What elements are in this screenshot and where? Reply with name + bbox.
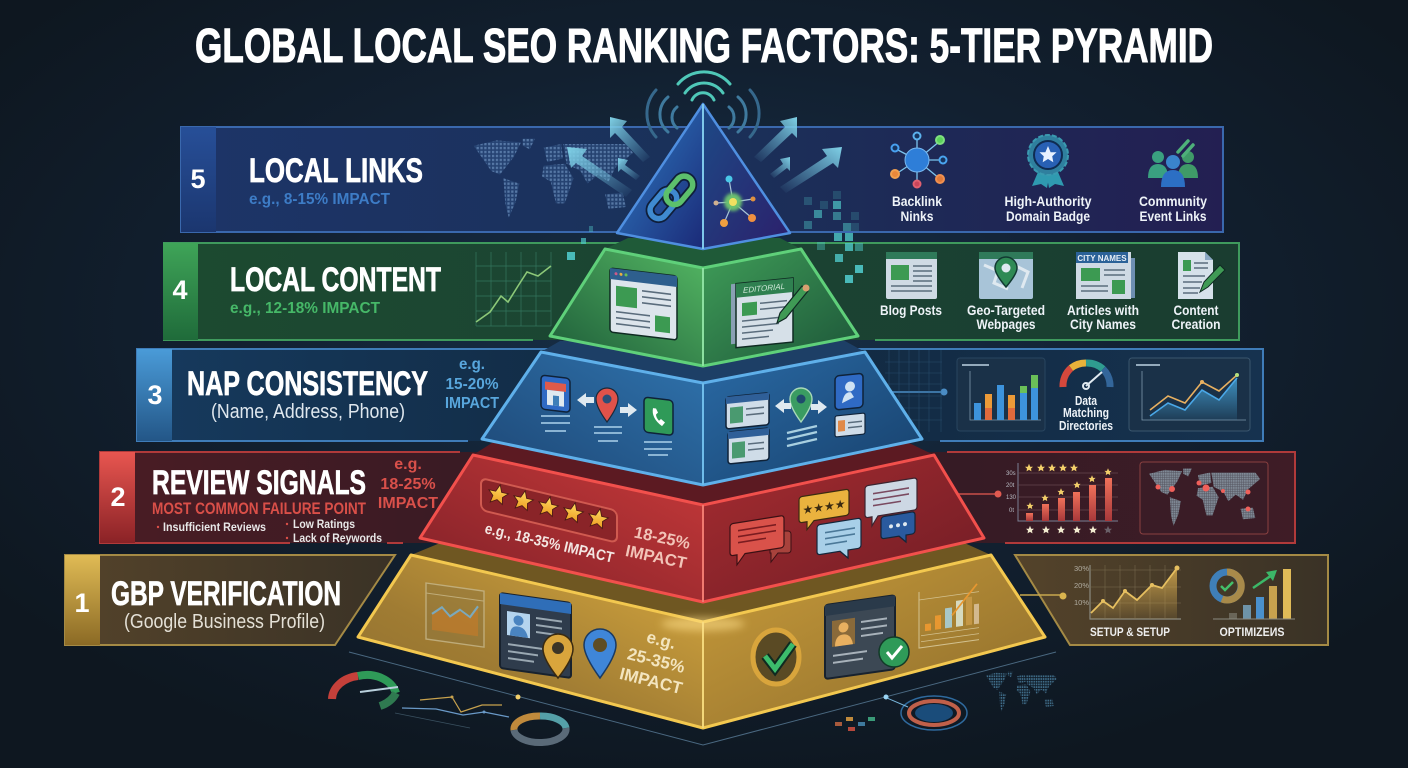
tier 3 impact: 15-20% [446,376,498,393]
icon: blue contact tile [835,373,863,410]
colored tile cluster [835,717,875,731]
icon: green phone tile [644,397,673,435]
icon: green map pin [790,388,812,422]
tier 2 number block: 2 [110,482,126,512]
label: community event links: Community [1139,193,1207,209]
tier 2 number block [100,452,135,543]
label: geo-targeted webpages: Geo-Targeted [967,302,1045,318]
tier 5 pyramid apex [617,104,790,249]
tier 3 number block [137,349,172,441]
label: content creation: Content [1174,302,1219,318]
tier 5 number block [181,127,216,232]
tier 5 heading: LOCAL LINKS [249,152,423,190]
label: geo-targeted webpages [967,302,1045,332]
label: data matching directories: Matching [1063,406,1109,420]
failure list: Lack of Reywords [293,531,382,545]
tier 1 impact text: 25-35% [625,644,687,677]
icon: articles with city names: CITY NAMES [1077,254,1127,263]
label: setup and setup: SETUP & SETUP [1090,625,1170,639]
icon: red map pin [596,388,618,422]
tier 3 band: NAP consistency [137,349,1263,441]
failure point note: MOST COMMON FAILURE POINT [152,499,366,518]
background grid [885,350,942,432]
label: backlink ninks [892,193,942,224]
tier 5 impact: e.g., 8-15% IMPACT [249,191,390,208]
tier 3 impact: e.g. [459,356,485,373]
tier 2 impact text: 18-25% [632,524,692,553]
icon: chain link [647,173,696,222]
tier 1 number block [65,555,100,645]
icon: content creation [1178,252,1225,299]
label: data matching directories: Directories [1059,419,1113,433]
tier 5 band: local links [181,127,1223,232]
icon: left-right arrows [577,393,637,417]
connector [885,388,948,396]
label: community event links: Event Links [1140,208,1207,224]
label: community event links [1139,193,1207,224]
label: data matching directories [1059,394,1113,433]
label: high-authority domain badge: High-Authority [1004,193,1092,209]
line chart panel [1129,358,1250,431]
small line chart [395,696,509,728]
icon: editorial newspaper [731,278,810,348]
pyramid bottom decorations [332,652,1057,745]
tier 4 impact: e.g., 12-18% IMPACT [230,300,380,317]
tier 3 heading: NAP CONSISTENCY [187,365,428,403]
tier 2 impact: 18-25% [380,476,436,493]
gold node [516,694,520,700]
icon: right arrows [775,399,827,414]
icon: verified profile window [825,595,895,679]
pyramid [358,104,1045,728]
setup line chart: 10% [1074,598,1089,607]
optimize donut and bars [1213,569,1295,619]
label: content creation [1172,302,1220,332]
tier 1 number block: 1 [74,588,90,618]
tier 4 pyramid block [550,238,858,366]
tier 4 growth chart [476,252,551,326]
tier 2 impact: IMPACT [378,495,438,512]
tier 2 impact: e.g. [394,456,422,473]
icon: community links [1148,141,1198,187]
tier 1 pyramid block [358,541,1045,728]
label: high-authority domain badge [1004,193,1092,224]
tier 2 heading: REVIEW SIGNALS [152,464,366,502]
label: articles with city names [1067,302,1139,332]
label: high-authority domain badge: Domain Badge [1006,208,1090,224]
review world map panel [1140,462,1268,534]
icon: authority badge [1028,135,1068,188]
tier 3 pyramid block [482,341,922,485]
review star bar chart: 20t [1006,483,1015,489]
label: content creation: Creation [1172,316,1220,332]
icon: five-star rating box [481,478,617,543]
icon: small contact card [835,413,865,437]
tier 4 heading: LOCAL CONTENT [230,261,441,299]
tier 1 impact text: IMPACT [618,664,685,698]
connector [1020,592,1066,600]
tier 3 subheading: (Name, Address, Phone) [211,401,405,423]
rating impact text: e.g., 18-35% IMPACT [483,520,616,567]
label: backlink ninks: Ninks [900,208,934,224]
ring dial [887,696,967,730]
review star bar chart [1006,463,1118,533]
review star bar chart: 130 [1006,495,1017,501]
tier 3 impact [445,356,499,412]
setup line chart [1074,564,1181,619]
tier 5 world map [474,139,633,218]
icon: blue map pin [584,629,616,678]
tier 5 number block: 5 [190,164,206,194]
gauge [332,675,398,706]
failure list: Low Ratings [293,517,355,531]
icon: blog posts [886,252,937,299]
info lines right [787,426,817,446]
tier 2 pyramid block [420,441,984,602]
review star bar chart: 30s [1006,471,1016,477]
tier 3 number block: 3 [147,380,163,410]
growth arrows [567,117,842,197]
icon: directory cards [726,393,769,464]
failure list: Insufficient Reviews [163,520,266,534]
tier 4 number block: 4 [172,275,188,305]
icon: dashboard window [426,583,484,647]
tier 2 band: review signals [100,452,1295,545]
icon: backlink network [891,132,946,188]
icon: glowing node network [714,176,756,227]
dotted map [986,672,1057,711]
label: backlink ninks: Backlink [892,193,942,209]
setup line chart: 20% [1074,581,1089,590]
icon: review speech bubbles: ★★★★ [803,497,845,517]
failure list [157,517,382,545]
label: optimizers: OPTIMIZEИS [1220,625,1284,639]
icon: gauge [1063,363,1110,389]
teal pixel scatter [567,191,863,283]
icon: verified check ring [753,630,799,684]
tier 1 band right: setup and optimize [1015,555,1328,645]
icon: rising bar chart [919,584,979,648]
setup line chart: 30% [1074,564,1089,573]
icon: editorial newspaper: EDITORIAL [743,282,785,295]
info lines left [541,416,672,455]
bar chart panel [957,358,1045,431]
tier 4 number block [163,243,198,340]
icon: web page window [610,268,677,340]
tier 1 band left: GBP verification [65,555,395,645]
label: data matching directories: Data [1075,394,1098,408]
icon: green check badge [879,637,909,667]
review star bar chart: 0t [1009,508,1014,514]
tier 1 subheading: (Google Business Profile) [124,611,325,633]
icon: geo-targeted webpage [979,252,1033,299]
tier 1 heading: GBP VERIFICATION [111,575,341,613]
label: geo-targeted webpages: Webpages [976,316,1036,332]
tier 3 impact: IMPACT [445,395,499,412]
icon: review speech bubbles [730,478,917,566]
connector [945,490,1002,498]
icon: articles with city names [1076,252,1135,299]
icon: business profile window [500,593,571,678]
icon: gold map pin [543,634,573,678]
tier 1 impact text: e.g. [645,627,678,653]
blue node [884,694,888,700]
tier 4 band: local content [163,243,1239,340]
label: articles with city names: City Names [1070,316,1136,332]
signal waves above apex [647,72,759,137]
donut [514,716,566,743]
icon: storefront [541,375,570,412]
label: articles with city names: Articles with [1067,302,1139,318]
label: blog posts: Blog Posts [880,302,942,318]
tier 2 impact text: IMPACT [624,542,688,573]
